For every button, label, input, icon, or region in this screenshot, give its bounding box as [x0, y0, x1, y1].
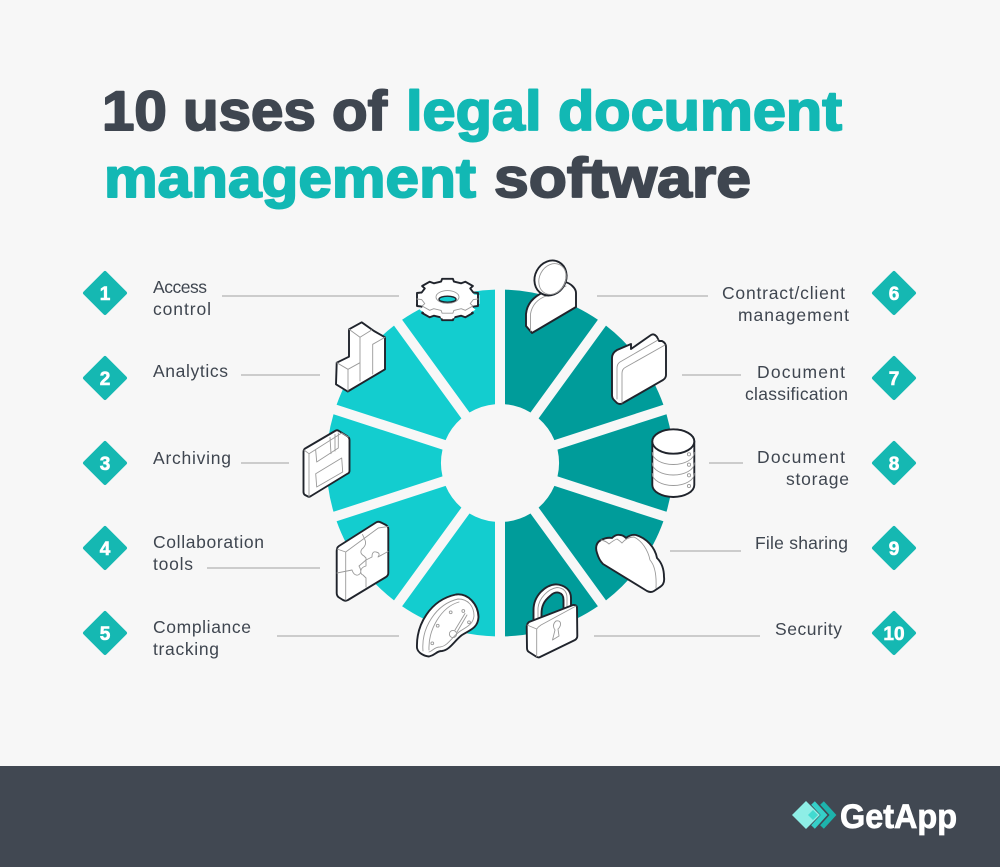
- item 5: Compliance tracking: tracking: [153, 639, 219, 659]
- item 7: Document classification: [745, 358, 914, 404]
- item 8: Document storage: [757, 443, 914, 489]
- segment 10: [505, 514, 598, 636]
- wordmark: GetApp: [840, 798, 957, 836]
- item 9: File sharing: File sharing: [755, 533, 848, 553]
- segment 9: [539, 486, 663, 600]
- item 2: Analytics: Analytics: [153, 361, 228, 381]
- item 6: Contract/client management: [722, 273, 914, 325]
- item 7: Document classification: classification: [745, 384, 848, 404]
- segment 7: [539, 326, 663, 440]
- icon: cloud: [596, 535, 664, 592]
- segment 2: [337, 326, 461, 440]
- icon: gauge: [417, 594, 478, 656]
- segment 5: [402, 514, 495, 636]
- item 5: Compliance tracking: Compliance: [153, 617, 251, 637]
- item 3: Archiving: [85, 443, 231, 483]
- item 4: Collaboration tools: [85, 528, 264, 574]
- donut chart: ten segments: [326, 290, 674, 636]
- GetApp logo: [792, 798, 957, 836]
- item 9: File sharing: 9: [889, 539, 899, 560]
- title: software: [494, 146, 751, 209]
- icon: database: [652, 429, 694, 497]
- item 1: Access control: [85, 273, 211, 319]
- item 4: Collaboration tools: 4: [100, 539, 111, 560]
- item 1: Access control: 1: [100, 284, 111, 305]
- item 8: Document storage: storage: [786, 469, 849, 489]
- icon: person: [526, 255, 576, 333]
- item 6: Contract/client management: 6: [889, 284, 899, 305]
- icon: floppy disk: [304, 430, 350, 497]
- item 2: Analytics: [85, 358, 228, 398]
- segment 8: [558, 414, 674, 512]
- icon: folder: [612, 334, 666, 404]
- item 5: Compliance tracking: 5: [100, 624, 111, 645]
- title: [102, 79, 842, 209]
- item 10: Security: Security: [775, 619, 842, 639]
- title: 10 uses of: [102, 79, 387, 142]
- title: legal document: [406, 79, 842, 142]
- item 2: Analytics: 2: [100, 369, 110, 390]
- segment 3: [326, 414, 442, 512]
- item 6: Contract/client management: Contract/client: [722, 283, 845, 303]
- item 7: Document classification: Document: [757, 362, 845, 382]
- item 4: Collaboration tools: tools: [153, 554, 193, 574]
- item 1: Access control: control: [153, 299, 211, 319]
- icon: padlock: [527, 584, 577, 657]
- icon: logo diamonds: [792, 801, 833, 829]
- item 9: File sharing: [755, 528, 914, 568]
- item 8: Document storage: 8: [889, 454, 899, 475]
- item 6: Contract/client management: management: [738, 305, 849, 325]
- icon: bar chart blocks: [336, 322, 385, 392]
- item 4: Collaboration tools: Collaboration: [153, 532, 264, 552]
- icon: puzzle: [337, 522, 388, 601]
- footer band: [0, 766, 1000, 867]
- segment 4: [337, 486, 461, 600]
- item 10: Security: [775, 613, 914, 653]
- item 8: Document storage: Document: [757, 447, 845, 467]
- segment 6: [505, 290, 598, 412]
- title: management: [104, 146, 476, 209]
- item 5: Compliance tracking: [85, 613, 251, 659]
- item 3: Archiving: Archiving: [153, 448, 231, 468]
- connector lines: [207, 296, 760, 636]
- item 3: Archiving: 3: [100, 454, 110, 475]
- item 10: Security: 10: [883, 624, 905, 645]
- item 7: Document classification: 7: [889, 369, 899, 390]
- segment 1: [402, 290, 495, 412]
- icon: gear: [417, 279, 478, 320]
- item 1: Access control: Access: [153, 277, 207, 297]
